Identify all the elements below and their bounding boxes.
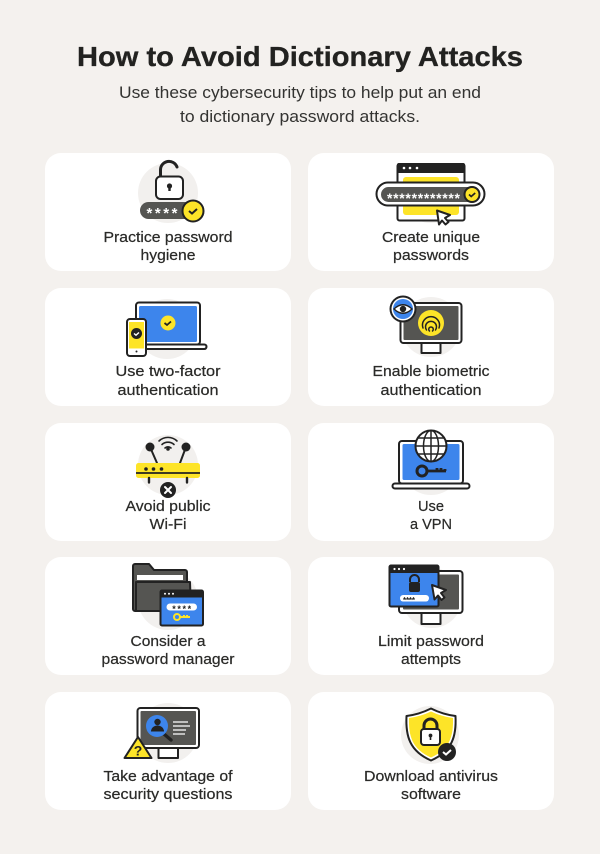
label: Wi-Fi	[150, 517, 186, 533]
label: passwords	[393, 248, 469, 264]
icon: laptop with globe and key	[392, 430, 470, 488]
label	[378, 634, 484, 668]
subtitle	[119, 83, 481, 126]
label: security questions	[104, 787, 232, 803]
label	[116, 364, 221, 399]
label	[126, 499, 210, 533]
label: Take advantage of	[104, 769, 234, 785]
label	[102, 634, 235, 668]
icon: monitor with login window: ****	[403, 596, 416, 605]
label	[372, 364, 490, 399]
icon: padlock with password check: ****	[146, 205, 178, 222]
icon: shield with lock and check	[406, 708, 456, 761]
label	[364, 769, 498, 803]
title: How to Avoid Dictionary Attacks	[77, 41, 523, 72]
label: Use	[418, 499, 444, 515]
panel: practice password hygiene	[45, 153, 291, 271]
icon: monitor with profile and warning	[124, 708, 199, 758]
panel: limit password attempts	[308, 557, 554, 675]
panel: two-factor authentication	[45, 288, 291, 406]
label: password manager	[102, 652, 235, 668]
panel: consider a password manager	[45, 557, 291, 675]
label: authentication	[118, 383, 218, 399]
icon: browser with long password	[376, 163, 484, 224]
icon: browser with long password: ************	[387, 190, 461, 206]
label: attempts	[401, 652, 461, 668]
label: Enable biometric	[372, 364, 490, 380]
subtitle: Use these cybersecurity tips to help put an end	[119, 83, 481, 102]
subtitle: to dictionary password attacks.	[180, 107, 420, 126]
label	[382, 230, 480, 264]
icon: monitor with profile and warning: ?	[134, 742, 142, 758]
panel: security questions	[45, 692, 291, 810]
label: Limit password	[378, 634, 484, 650]
label: Use two-factor	[116, 364, 221, 380]
icon: folder and key window: ****	[172, 604, 192, 614]
label: Practice password	[104, 230, 232, 246]
label: Create unique	[382, 230, 480, 246]
icon: padlock with password check	[140, 161, 204, 222]
icon: laptop and phone	[127, 302, 206, 356]
label: authentication	[380, 383, 482, 399]
label	[104, 769, 234, 803]
panel: avoid public wi-fi	[45, 423, 291, 541]
panel: use a vpn	[308, 423, 554, 541]
panel: biometric authentication	[308, 288, 554, 406]
label: a VPN	[410, 517, 452, 533]
icon: monitor with fingerprint and eye	[390, 296, 462, 353]
label: software	[401, 787, 461, 803]
icon: monitor with login window	[389, 565, 462, 624]
icon: folder and key window	[133, 564, 204, 626]
panel: create unique passwords	[308, 153, 554, 271]
icon: router with crossed wifi	[136, 437, 200, 498]
label: Avoid public	[126, 499, 210, 515]
panel: download antivirus software	[308, 692, 554, 810]
label: hygiene	[140, 248, 196, 264]
label: Consider a	[130, 634, 206, 650]
label	[410, 499, 452, 533]
label: Download antivirus	[364, 769, 498, 785]
label	[104, 230, 232, 264]
